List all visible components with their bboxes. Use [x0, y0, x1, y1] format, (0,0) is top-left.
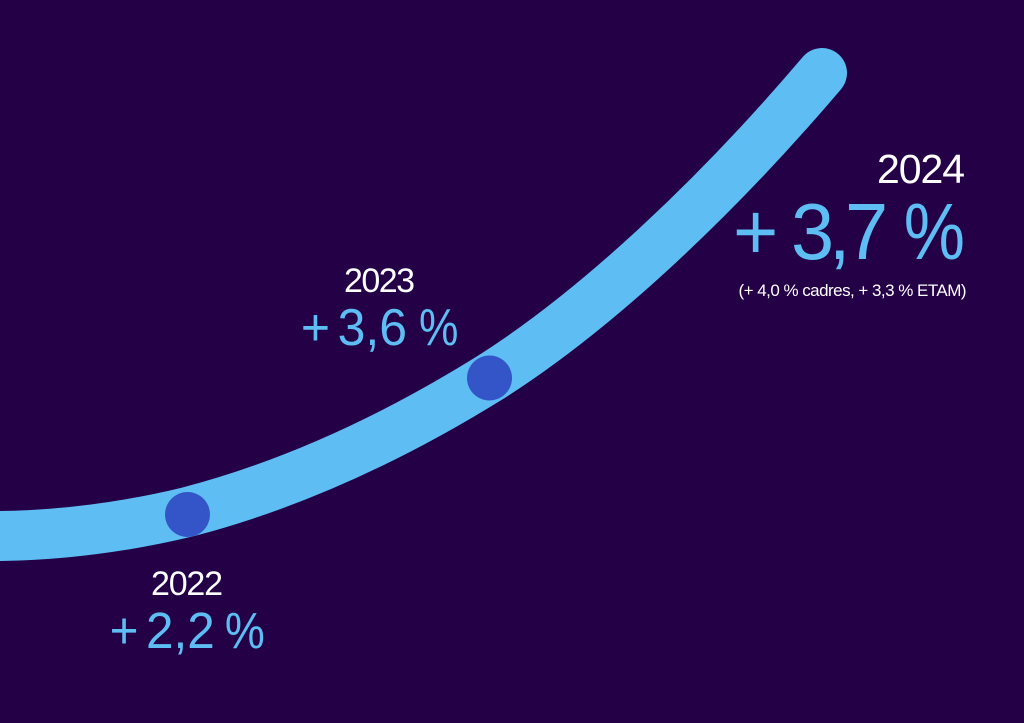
label: 2024: 2024: [877, 146, 965, 192]
marker: 2022: [165, 492, 210, 537]
label: 2024: %: [904, 186, 965, 276]
label: 2022: %: [225, 603, 265, 660]
label: 2022: 2,2: [146, 602, 215, 659]
label: 2024: [733, 146, 966, 300]
label: 2022: +: [110, 602, 138, 659]
label: 2024: 3,7: [791, 187, 884, 276]
label: 2023: 2023: [344, 262, 415, 300]
label: 2024: (+ 4,0 % cadres, + 3,3 % ETAM): [738, 281, 966, 300]
label: 2022: [110, 565, 265, 660]
label: 2023: +: [301, 298, 330, 356]
label: 2023: %: [419, 300, 458, 357]
marker: 2023: [467, 356, 512, 400]
label: 2024: +: [733, 187, 778, 276]
label: 2022: 2022: [151, 565, 223, 603]
label: 2023: 3,6: [338, 298, 407, 356]
curve line: [0, 73, 822, 536]
label: 2023: [301, 262, 458, 357]
